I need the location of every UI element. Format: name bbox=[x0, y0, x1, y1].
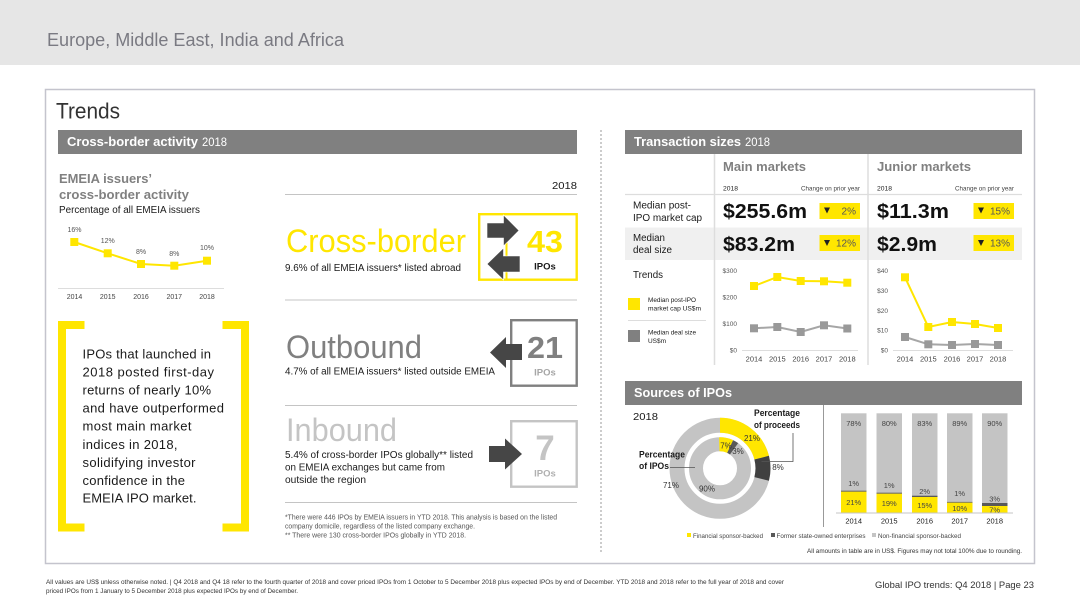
line chart: main markets: $100 bbox=[723, 321, 737, 328]
line chart: junior markets: $0 bbox=[881, 348, 888, 354]
stacked bar chart: sources by year: 80% bbox=[882, 419, 897, 428]
table: medians: $11.3m bbox=[877, 201, 949, 223]
stacked bar chart: sources by year: 83% bbox=[917, 419, 933, 428]
line chart: main markets: 2016 bbox=[792, 354, 809, 364]
stacked bar chart: sources by year: 2015 bbox=[881, 516, 898, 526]
callout: first-day returns quote: most main market bbox=[82, 419, 192, 434]
cross-border row: 9.6% of all EMEIA issuers* listed abroad bbox=[285, 263, 461, 274]
header band bbox=[0, 0, 1080, 65]
stacked bar chart: sources by year: 19% bbox=[882, 499, 897, 508]
table: medians: $255.6m bbox=[723, 201, 807, 223]
stacked bar chart: sources by year bbox=[836, 413, 1013, 526]
line chart: main markets: 2014 bbox=[746, 354, 762, 364]
legend: sources: Former state-owned enterprises bbox=[776, 533, 866, 540]
footnotes: company domicile, regardless of the listed company exchange. bbox=[285, 524, 475, 530]
outbound row: Outbound bbox=[286, 329, 422, 365]
legend: trends: market cap US$m bbox=[648, 306, 701, 312]
footnotes bbox=[285, 502, 577, 540]
panel: transaction sizes bbox=[625, 130, 1022, 365]
callout: percentage of proceeds: Percentage bbox=[754, 408, 800, 418]
line chart: main markets: $0 bbox=[730, 348, 737, 354]
heading: cross-border activity: 2018 bbox=[202, 137, 227, 149]
callout: first-day returns quote: IPOs that launched in bbox=[82, 346, 211, 362]
legend: trends: Trends bbox=[633, 269, 663, 281]
callout: first-day returns quote bbox=[62, 325, 245, 528]
subheading: EMEIA issuers: cross-border activity bbox=[59, 187, 190, 202]
inbound row: 5.4% of cross-border IPOs globally** listed bbox=[285, 450, 473, 461]
change badge: -12%: 12% bbox=[836, 238, 856, 250]
callout: percentage of IPOs: Percentage bbox=[639, 450, 685, 460]
table: medians bbox=[625, 154, 1022, 365]
stacked bar chart: sources by year: 15% bbox=[917, 501, 933, 510]
callout: first-day returns quote: and have outperformed bbox=[82, 400, 224, 416]
table: medians: $2.9m bbox=[877, 234, 937, 256]
change badge: -13% bbox=[974, 235, 1014, 251]
footer notes: priced IPOs from 1 January to 5 December 2018 plus expected IPOs by end of December. bbox=[46, 588, 298, 595]
line chart: junior markets: $30 bbox=[877, 288, 888, 295]
legend: sources bbox=[687, 533, 961, 540]
count box: 7 IPOs: 7 bbox=[535, 429, 555, 468]
change badge: -2% bbox=[820, 203, 860, 219]
icon: arrow out bbox=[487, 215, 519, 246]
donut chart: proceeds and IPOs: 90% bbox=[699, 484, 715, 494]
callout: first-day returns quote: indices in 2018, bbox=[82, 437, 178, 452]
count box: 43 IPOs: 43 bbox=[527, 224, 563, 259]
table: medians: Median bbox=[633, 233, 665, 244]
line chart: cross-border share: 12% bbox=[101, 238, 115, 245]
panel: cross-border activity bbox=[58, 130, 577, 540]
donut chart: proceeds and IPOs: 3% bbox=[732, 447, 744, 456]
line chart: junior markets: 2017 bbox=[967, 354, 983, 364]
line chart: junior markets: 2018 bbox=[990, 354, 1006, 364]
line chart: cross-border share: 8% bbox=[169, 251, 179, 258]
icon: arrow outbound bbox=[490, 337, 522, 368]
line chart: main markets: 2018 bbox=[839, 354, 856, 364]
line chart: main markets bbox=[723, 268, 858, 364]
line chart: cross-border share: 2014 bbox=[67, 294, 82, 301]
callout: percentage of IPOs: of IPOs bbox=[639, 461, 669, 471]
line chart: junior markets: 2014 bbox=[897, 354, 913, 364]
callout: percentage of IPOs bbox=[639, 450, 695, 471]
stacked bar chart: sources by year: 1% bbox=[848, 479, 859, 488]
line chart: main markets: 2017 bbox=[816, 354, 832, 364]
stacked bar chart: sources by year: 89% bbox=[952, 419, 968, 428]
subheading: EMEIA issuers bbox=[59, 171, 200, 216]
stacked bar chart: sources by year: 1% bbox=[884, 481, 895, 490]
donut chart: proceeds and IPOs: 8% bbox=[772, 463, 784, 472]
icon: arrow in bbox=[487, 248, 520, 280]
count box: 7 IPOs bbox=[511, 421, 577, 487]
header band: Europe, Middle East, India and Africa bbox=[47, 30, 345, 50]
page reference: Global IPO trends: Q4 2018 | Page 23 bbox=[875, 580, 1034, 591]
heading: transaction sizes bbox=[625, 130, 1022, 154]
outbound row bbox=[285, 300, 577, 386]
callout: first-day returns quote: returns of nearly 10% bbox=[82, 382, 211, 398]
table: medians: Change on prior year bbox=[801, 186, 861, 192]
line chart: junior markets: $20 bbox=[877, 308, 888, 315]
table: medians: IPO market cap bbox=[633, 213, 702, 224]
table: medians: 2018 bbox=[723, 186, 738, 192]
subheading: EMEIA issuers: EMEIA issuers’ bbox=[59, 171, 152, 186]
callout: first-day returns quote: EMEIA IPO market. bbox=[82, 491, 196, 506]
callout: percentage of proceeds: of proceeds bbox=[754, 420, 800, 430]
inbound row: Inbound bbox=[286, 412, 397, 448]
callout: first-day returns quote: solidifying investor bbox=[82, 455, 196, 470]
stacked bar chart: sources by year: 1% bbox=[954, 489, 965, 498]
subheading: EMEIA issuers: Percentage of all EMEIA issuers bbox=[59, 205, 200, 216]
legend: sources: Financial sponsor-backed bbox=[693, 533, 763, 540]
note: rounding: All amounts in table are in US$. Figures may not total 100% due to rounding. bbox=[807, 548, 1022, 555]
heading: cross-border activity bbox=[58, 130, 577, 154]
donut chart: proceeds and IPOs bbox=[663, 425, 784, 511]
footer notes bbox=[46, 579, 785, 595]
heading: transaction sizes: 2018 bbox=[745, 137, 770, 149]
inbound row bbox=[285, 406, 577, 487]
main panel frame bbox=[46, 90, 1034, 564]
line chart: junior markets: $40 bbox=[877, 268, 888, 275]
callout: first-day returns quote: confidence in the bbox=[82, 473, 185, 488]
count box: 21 IPOs: IPOs bbox=[534, 368, 556, 378]
stacked bar chart: sources by year: 10% bbox=[952, 504, 968, 513]
footnotes: *There were 446 IPOs by EMEIA issuers in YTD 2018. This analysis is based on the listed bbox=[285, 514, 557, 522]
inbound row: outside the region bbox=[285, 475, 366, 486]
line chart: junior markets: $10 bbox=[877, 328, 888, 334]
line chart: junior markets bbox=[877, 268, 1013, 364]
count box: 43 IPOs: IPOs bbox=[534, 262, 556, 272]
table: medians: Change on prior year bbox=[955, 186, 1015, 192]
cross-border row bbox=[285, 194, 577, 280]
change badge: -15% bbox=[974, 203, 1014, 219]
stacked bar chart: sources by year: 2014 bbox=[845, 516, 862, 526]
legend: trends: Median deal size bbox=[648, 330, 697, 336]
change badge: -2%: 2% bbox=[842, 206, 856, 218]
heading: transaction sizes: Transaction sizes bbox=[634, 134, 741, 149]
line chart: junior markets: 2016 bbox=[944, 354, 960, 364]
legend: trends: US$m bbox=[648, 338, 666, 345]
callout: first-day returns quote: 2018 posted first-day bbox=[82, 364, 214, 380]
heading: sources of IPOs: Sources of IPOs bbox=[634, 385, 732, 400]
count box: 7 IPOs: IPOs bbox=[534, 468, 556, 480]
line chart: cross-border share: 2015 bbox=[100, 294, 116, 301]
year label: donut: 2018 bbox=[633, 412, 658, 423]
heading: sources of IPOs bbox=[625, 381, 1022, 405]
table: medians: Junior markets bbox=[877, 159, 971, 174]
line chart: cross-border share bbox=[58, 227, 224, 301]
stacked bar chart: sources by year: 21% bbox=[846, 498, 862, 507]
count box: 43 IPOs bbox=[479, 214, 577, 280]
donut chart: proceeds and IPOs: 7% bbox=[720, 442, 732, 450]
line chart: cross-border share: 8% bbox=[136, 249, 146, 256]
icon: arrow inbound bbox=[489, 438, 522, 470]
stacked bar chart: sources by year: 3% bbox=[989, 494, 1000, 504]
stacked bar chart: sources by year: 78% bbox=[846, 419, 862, 428]
donut chart: proceeds and IPOs: 71% bbox=[663, 481, 679, 490]
table: medians: Median post- bbox=[633, 200, 691, 212]
donut chart: proceeds and IPOs: 21% bbox=[744, 434, 760, 443]
legend: sources: Non-financial sponsor-backed bbox=[878, 533, 961, 540]
footer notes: All values are US$ unless otherwise noted. | Q4 2018 and Q4 18 refer to the fourth quarter of 2018 and cover priced IPOs from 1 October to 5 December 2018 plus expected IPOs by end of December. YTD 2018 and 2018 refer to the full year of 2018 and cover bbox=[46, 579, 785, 586]
cross-border row: Cross-border bbox=[286, 223, 466, 259]
legend: trends: Median post-IPO bbox=[648, 297, 696, 304]
title: Trends bbox=[56, 98, 120, 124]
table: medians: $83.2m bbox=[723, 234, 795, 256]
year label: 2018 bbox=[552, 181, 577, 192]
heading: cross-border activity: Cross-border activity bbox=[67, 134, 199, 149]
table: medians: deal size bbox=[633, 245, 672, 256]
table: medians: 2018 bbox=[877, 186, 892, 192]
callout: percentage of proceeds bbox=[754, 408, 800, 462]
change badge: -13%: 13% bbox=[990, 238, 1010, 250]
line chart: cross-border share: 16% bbox=[67, 227, 82, 234]
line chart: main markets: $200 bbox=[723, 294, 737, 302]
line chart: cross-border share: 10% bbox=[200, 245, 214, 252]
inbound row: on EMEIA exchanges but came from bbox=[285, 462, 445, 474]
change badge: -15%: 15% bbox=[990, 206, 1010, 218]
stacked bar chart: sources by year: 7% bbox=[989, 506, 1000, 514]
table: medians: Main markets bbox=[723, 159, 806, 174]
line chart: cross-border share: 2017 bbox=[167, 294, 182, 301]
stacked bar chart: sources by year: 2% bbox=[919, 487, 930, 496]
line chart: cross-border share: 2018 bbox=[199, 294, 215, 301]
count box: 21 IPOs: 21 bbox=[527, 330, 563, 365]
change badge: -12% bbox=[820, 235, 860, 251]
count box: 21 IPOs bbox=[511, 320, 577, 386]
stacked bar chart: sources by year: 2018 bbox=[986, 516, 1003, 526]
panel: sources of IPOs bbox=[625, 381, 1022, 555]
stacked bar chart: sources by year: 90% bbox=[987, 419, 1003, 428]
legend: trends bbox=[628, 269, 706, 345]
line chart: junior markets: 2015 bbox=[920, 354, 937, 364]
stacked bar chart: sources by year: 2016 bbox=[916, 516, 933, 526]
stacked bar chart: sources by year: 2017 bbox=[951, 516, 968, 526]
line chart: main markets: $300 bbox=[723, 268, 737, 275]
outbound row: 4.7% of all EMEIA issuers* listed outside EMEIA bbox=[285, 366, 495, 378]
line chart: cross-border share: 2016 bbox=[133, 294, 149, 301]
line chart: main markets: 2015 bbox=[769, 354, 786, 364]
footnotes: ** There were 130 cross-border IPOs globally in YTD 2018. bbox=[285, 532, 466, 540]
